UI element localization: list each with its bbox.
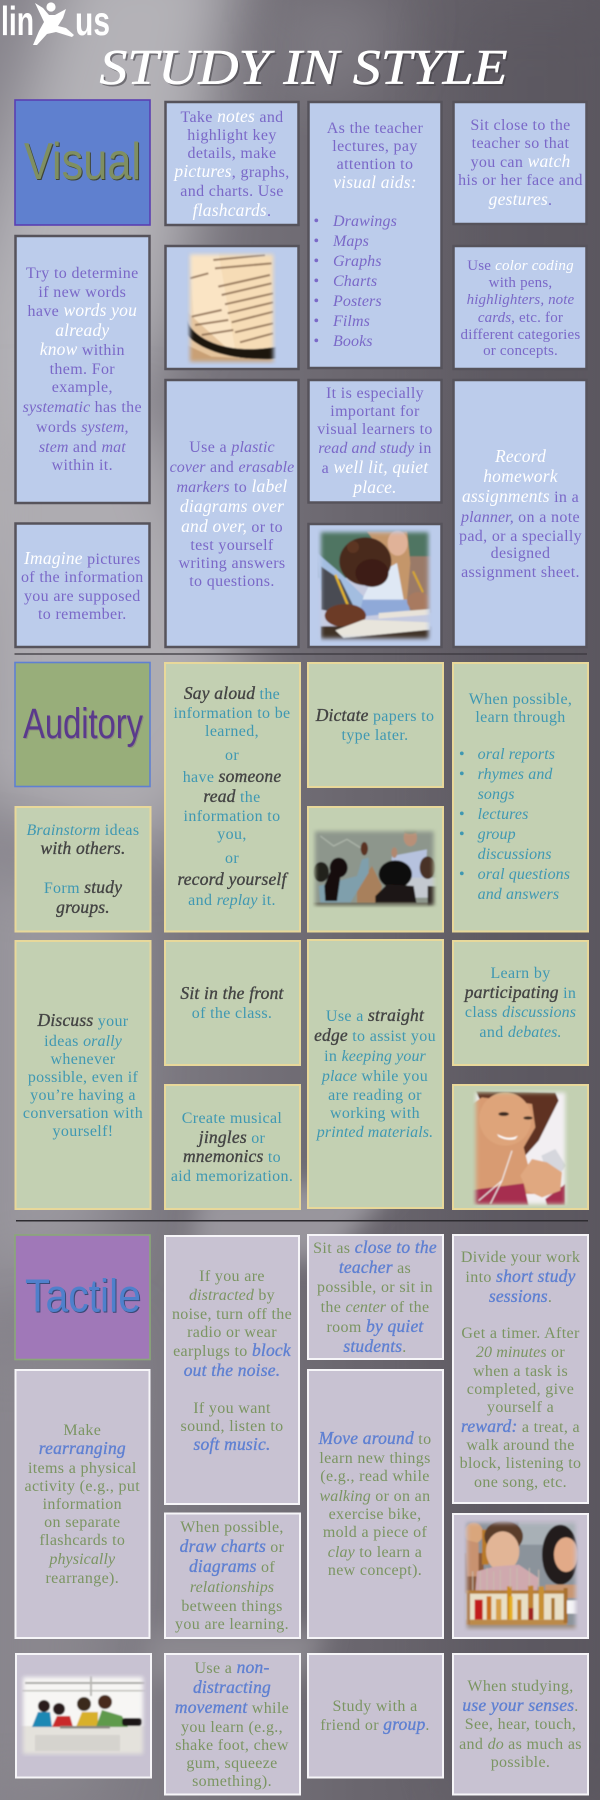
- panel: learn through: rhymes and: [478, 766, 553, 783]
- panel: short study sessions: Get a timer. After: [461, 1325, 580, 1342]
- panel: short study sessions: into short study: [465, 1266, 576, 1286]
- panel: study with friend: Study with a: [332, 1698, 418, 1715]
- panel: close to teacher: [308, 1235, 443, 1359]
- panel: jingles: Create musical: [182, 1110, 282, 1127]
- panel: record homework: planner, on a note: [460, 509, 580, 526]
- panel: move around: exercise bike,: [329, 1506, 421, 1523]
- panel: draw charts: between things: [181, 1598, 283, 1615]
- logo: linkus: [1, 0, 110, 45]
- panel: imagine: Imagine pictures: [23, 548, 141, 568]
- panel: straight edge: edge to assist you: [314, 1025, 436, 1045]
- panel: participating: and debates.: [479, 1024, 562, 1041]
- panel: visual aids: •: [314, 253, 319, 270]
- panel: words within words: them. For: [50, 361, 115, 378]
- panel: rearranging: on separate: [44, 1514, 120, 1531]
- panel: block noise: If you are: [199, 1268, 265, 1285]
- panel: close to teacher: room by quiet: [326, 1316, 424, 1336]
- panel: non-distracting movement: something).: [192, 1773, 272, 1790]
- panel: visual aids: •: [314, 233, 319, 250]
- panel: visual aids: Films: [332, 313, 370, 330]
- panel: imagine: to remember.: [38, 606, 127, 623]
- panel: well lit place: It is especially: [326, 385, 424, 402]
- panel: visual aids: As the teacher: [327, 120, 424, 137]
- panel: well lit place: a well lit, quiet: [322, 457, 429, 477]
- panel: words within words: have words you: [28, 300, 137, 320]
- panel: words within words: [16, 236, 150, 503]
- panel: children reading photo: [16, 1654, 151, 1778]
- panel: color coding: with pens,: [489, 275, 552, 291]
- panel: non-distracting movement: movement while: [175, 1697, 289, 1717]
- panel: record homework: designed: [491, 545, 550, 562]
- panel: short study sessions: reward: a treat, a: [461, 1416, 580, 1436]
- panel: take notes: and charts. Use: [180, 183, 284, 200]
- panel: learn through: group: [478, 826, 516, 843]
- panel: color coding: or concepts.: [483, 343, 558, 359]
- panel: jingles: aid memorization.: [171, 1168, 293, 1185]
- panel: take notes: Take notes and: [180, 106, 284, 126]
- panel: say aloud: or: [225, 850, 239, 867]
- panel: boy studying photo: [308, 524, 442, 647]
- panel: visual aids: Books: [333, 333, 373, 350]
- panel: participating: Learn by: [490, 965, 551, 982]
- panel: learn through: •: [459, 766, 465, 783]
- panel: sit close: teacher so that: [472, 135, 570, 152]
- section: visual: [15, 100, 586, 647]
- panel: short study sessions: walk around the: [466, 1437, 575, 1454]
- panel: short study sessions: block, listening to: [460, 1455, 581, 1472]
- panel: use your senses: See, hear, touch,: [465, 1716, 576, 1733]
- panel: use your senses: When studying,: [467, 1678, 574, 1695]
- panel: record homework: Record: [494, 446, 546, 466]
- panel: learn through: lectures: [478, 806, 528, 823]
- panel: say aloud: record yourself: [177, 869, 288, 889]
- panel: say aloud: you,: [217, 826, 247, 843]
- panel: dictate: [308, 663, 443, 787]
- panel: rearranging: activity (e.g., put: [25, 1478, 140, 1495]
- panel: say aloud: or: [225, 747, 239, 764]
- panel: well lit place: read and study in: [318, 440, 432, 457]
- panel: move around: clay to learn a: [328, 1544, 422, 1561]
- panel: learn through: •: [459, 826, 465, 843]
- panel: close to teacher: teacher as: [339, 1257, 411, 1277]
- panel: study with friend: [308, 1654, 443, 1778]
- panel: short study sessions: when a task is: [473, 1363, 568, 1380]
- panel: visual aids: Posters: [332, 293, 382, 310]
- panel: imagine: you are supposed: [24, 588, 141, 605]
- panel: straight edge: place while you: [321, 1068, 428, 1085]
- panel: non-distracting movement: shake foot, chew: [175, 1737, 289, 1754]
- panel: rearranging: physically: [48, 1551, 116, 1568]
- panel: words within words: Try to determine: [26, 265, 139, 282]
- panel: short study sessions: 20 minutes or: [476, 1344, 565, 1361]
- heading: Tactile: Tactile: [26, 1270, 142, 1322]
- panel: close to teacher: possible, or sit in: [317, 1279, 433, 1296]
- panel: rearranging: rearrange).: [46, 1570, 119, 1587]
- panel: visual aids: Maps: [332, 233, 369, 250]
- panel: words within words: systematic has the: [23, 399, 142, 416]
- panel: learn through: [453, 663, 588, 932]
- panel: words within words: within it.: [52, 457, 113, 474]
- panel: short study sessions: [453, 1235, 588, 1503]
- panel: take notes: highlight key: [187, 127, 277, 144]
- panel: words within words: example,: [52, 379, 113, 396]
- panel: jingles: mnemonics to: [183, 1146, 281, 1166]
- panel: block noise: earplugs to block: [173, 1340, 292, 1360]
- panel: move around: learn new things: [319, 1450, 431, 1467]
- panel: learn through: learn through: [475, 709, 566, 726]
- panel: visual aids: •: [314, 313, 319, 330]
- panel: label diagrams: cover and erasable: [170, 459, 294, 476]
- panel: move around: new concept).: [328, 1562, 422, 1579]
- panel: learn through: When possible,: [469, 691, 572, 708]
- panel: draw charts: When possible,: [180, 1519, 284, 1536]
- panel: non-distracting movement: gum, squeeze: [186, 1755, 278, 1772]
- panel: visual aids: lectures, pay: [332, 138, 418, 155]
- title: STUDY IN STYLE: [102, 40, 509, 96]
- panel: move around: mold a piece of: [323, 1524, 427, 1541]
- panel: woman with headphones photo: [453, 1085, 588, 1209]
- panel: block noise: radio or wear: [187, 1324, 277, 1341]
- panel: say aloud: Say aloud the: [184, 683, 280, 703]
- divider: [14, 653, 587, 655]
- panel: use your senses: use your senses.: [462, 1695, 579, 1715]
- panel: move around: [308, 1370, 443, 1638]
- panel: take notes: [166, 102, 298, 225]
- panel: straight edge: in keeping your: [324, 1048, 427, 1065]
- panel: say aloud: learned,: [205, 723, 259, 740]
- panel: well lit place: [308, 380, 442, 502]
- panel: visual aids: •: [314, 213, 319, 230]
- panel: visual aids: attention to: [337, 156, 413, 173]
- panel: visual aids: [308, 102, 442, 368]
- panel: learn through: and answers: [478, 886, 559, 903]
- panel: label diagrams: to questions.: [189, 573, 275, 590]
- panel: color coding: highlighters, note: [467, 292, 575, 308]
- heading: Visual: Visual: [24, 133, 141, 191]
- panel: brainstorm: [16, 807, 150, 932]
- panel: sit close: Sit close to the: [470, 117, 571, 134]
- panel: words within words: know within: [40, 339, 125, 359]
- panel: sit in front: of the class.: [192, 1005, 272, 1022]
- panel: take notes: details, make: [188, 145, 276, 162]
- panel: visual aids: Graphs: [333, 253, 382, 270]
- panel: visual aids: •: [314, 273, 319, 290]
- panel: block noise: noise, turn off the: [172, 1306, 292, 1323]
- panel: close to teacher: the center of the: [321, 1299, 429, 1316]
- heading: Auditory: Auditory: [23, 700, 143, 748]
- panel: move around: (e.g., read while: [320, 1468, 430, 1485]
- panel: discuss orally: yourself!: [53, 1123, 113, 1140]
- panel: straight edge: [308, 940, 443, 1208]
- panel: label diagrams: Use a plastic: [189, 439, 275, 456]
- panel: discuss orally: conversation with: [23, 1105, 143, 1122]
- panel: well lit place: visual learners to: [317, 421, 433, 438]
- panel: record homework: homework: [483, 466, 559, 486]
- heading: Tactile: Tactile: [25, 1270, 141, 1322]
- panel: close to teacher: students.: [343, 1336, 407, 1356]
- panel: block noise: out the noise.: [184, 1360, 280, 1380]
- panel: rearranging: [16, 1370, 150, 1638]
- panel: record homework: assignment sheet.: [461, 564, 580, 581]
- panel: take notes: pictures, graphs,: [172, 161, 290, 181]
- panel: discuss orally: whenever: [50, 1051, 116, 1068]
- panel: say aloud: information to: [184, 808, 280, 825]
- panel: learn through: songs: [478, 786, 515, 803]
- panel: short study sessions: yourself a: [487, 1399, 554, 1416]
- panel: take notes: flashcards.: [193, 200, 271, 220]
- panel: straight edge: working with: [330, 1105, 420, 1122]
- divider: [16, 1220, 588, 1222]
- panel: draw charts: you are learning.: [175, 1616, 289, 1633]
- panel: learn through: discussions: [478, 846, 552, 863]
- panel: learn through: •: [459, 806, 465, 823]
- panel: move around: Move around to: [318, 1428, 431, 1448]
- panel: use your senses: [453, 1654, 588, 1794]
- panel: record homework: [454, 380, 586, 647]
- panel: participating: participating in: [463, 982, 576, 1002]
- panel: close to teacher: Sit as close to the: [313, 1237, 437, 1257]
- panel: discuss orally: [16, 941, 150, 1209]
- panel: visual aids: visual aids:: [333, 172, 417, 192]
- panel: imagine: [16, 524, 150, 647]
- panel: rearranging: items a physical: [28, 1460, 137, 1477]
- panel: participating: class discussions: [465, 1004, 576, 1021]
- panel: non-distracting movement: Use a non-: [195, 1657, 269, 1677]
- panel: dictate: type later.: [342, 727, 408, 744]
- panel: sit in front: [165, 941, 300, 1065]
- panel: draw charts: relationships: [190, 1579, 274, 1596]
- panel: rearranging: rearranging: [39, 1438, 126, 1458]
- panel: rearranging: Make: [63, 1422, 101, 1439]
- panel: move around: walking or on an: [320, 1488, 430, 1505]
- panel: discuss orally: you’re having a: [30, 1087, 136, 1104]
- panel: dictate: Dictate papers to: [315, 705, 434, 725]
- panel: brainstorm: Brainstorm ideas: [27, 822, 139, 839]
- panel: sit close: you can watch: [471, 151, 570, 171]
- panel: learn through: •: [459, 746, 465, 763]
- panel: words within words: words system,: [36, 419, 129, 436]
- panel: say aloud: have someone: [183, 766, 281, 786]
- panel: non-distracting movement: distracting: [193, 1677, 271, 1697]
- panel: sit close: [454, 102, 586, 224]
- panel: visual aids: •: [314, 333, 319, 350]
- panel: learn through: •: [459, 866, 465, 883]
- panel: use your senses: possible.: [491, 1754, 550, 1771]
- panel: draw charts: draw charts or: [180, 1536, 285, 1556]
- panel: straight edge: Use a straight: [326, 1005, 425, 1025]
- panel: draw charts: diagrams of: [189, 1556, 275, 1576]
- panel: block noise: distracted by: [189, 1287, 275, 1304]
- panel: color coding: [454, 246, 586, 369]
- panel: brainstorm: groups.: [56, 897, 110, 917]
- section: auditory: [15, 662, 588, 1209]
- panel: label diagrams: markers to label: [176, 476, 288, 496]
- panel: rearranging: information: [43, 1496, 122, 1513]
- panel: non-distracting movement: you learn (e.g.,: [181, 1719, 283, 1736]
- panel: brainstorm: Form study: [44, 877, 122, 897]
- panel: sit in front: Sit in the front: [180, 983, 285, 1003]
- heading: Visual: [15, 100, 150, 225]
- panel: brainstorm: with others.: [40, 838, 126, 858]
- panel: color coding: different categories: [461, 327, 580, 343]
- panel: visual aids: •: [314, 293, 319, 310]
- panel: say aloud: [165, 663, 300, 932]
- panel: short study sessions: one song, etc.: [474, 1474, 567, 1491]
- panel: short study sessions: sessions.: [489, 1286, 552, 1306]
- panel: jingles: jingles or: [197, 1127, 266, 1147]
- panel: participating: [453, 941, 588, 1065]
- panel: words within words: already: [55, 320, 109, 340]
- panel: discuss orally: possible, even if: [28, 1069, 139, 1086]
- panel: dictionary photo: [166, 246, 298, 369]
- panel: rearranging: flashcards to: [39, 1532, 125, 1549]
- panel: jingles: [165, 1085, 300, 1209]
- panel: label diagrams: and over, or to: [181, 516, 283, 536]
- panel: discuss orally: ideas orally: [44, 1033, 123, 1050]
- panel: color coding: Use color coding: [467, 258, 574, 274]
- panel: say aloud: read the: [203, 786, 261, 806]
- panel: color coding: cards, etc. for: [478, 310, 563, 326]
- panel: learn through: oral questions: [478, 866, 570, 883]
- panel: learn through: oral reports: [478, 746, 555, 763]
- panel: say aloud: information to be: [173, 705, 291, 722]
- panel: words within words: if new words: [38, 284, 126, 301]
- panel: well lit place: important for: [330, 403, 420, 420]
- panel: non-distracting movement: [165, 1654, 300, 1794]
- panel: visual aids: Drawings: [332, 213, 397, 230]
- panel: record homework: pad, or a specially: [459, 528, 582, 545]
- panel: sit close: gestures.: [489, 189, 552, 209]
- heading: Auditory: Auditory: [24, 701, 144, 749]
- panel: sit close: his or her face and: [458, 172, 583, 189]
- panel: use your senses: and do as much as: [459, 1736, 582, 1753]
- panel: short study sessions: Divide your work: [461, 1249, 580, 1266]
- heading: Auditory: [15, 662, 150, 786]
- panel: straight edge: are reading or: [328, 1087, 422, 1104]
- title: STUDY IN STYLE: [100, 38, 507, 94]
- panel: label diagrams: [166, 380, 298, 647]
- panel: test tubes photo: [453, 1514, 588, 1638]
- panel: straight edge: printed materials.: [316, 1124, 433, 1141]
- panel: visual aids: Charts: [333, 273, 377, 290]
- panel: draw charts: [165, 1514, 300, 1638]
- panel: words within words: stem and mat: [39, 439, 126, 456]
- panel: classroom photo: [308, 807, 443, 932]
- panel: say aloud: and replay it.: [188, 892, 276, 909]
- panel: block noise: sound, listen to: [181, 1418, 283, 1435]
- section: tactile: [15, 1235, 588, 1794]
- panel: label diagrams: test yourself: [190, 537, 274, 554]
- panel: record homework: assignments in a: [462, 486, 579, 506]
- panel: label diagrams: writing answers: [178, 555, 286, 572]
- heading: Visual: Visual: [25, 134, 142, 192]
- panel: block noise: [165, 1236, 299, 1504]
- panel: discuss orally: Discuss your: [37, 1010, 129, 1030]
- panel: short study sessions: completed, give: [467, 1381, 574, 1398]
- panel: block noise: If you want: [193, 1400, 271, 1417]
- panel: study with friend: friend or group.: [320, 1714, 430, 1734]
- heading: Tactile: [15, 1235, 150, 1360]
- panel: block noise: soft music.: [193, 1434, 271, 1454]
- panel: imagine: of the information: [21, 569, 144, 586]
- panel: label diagrams: diagrams over: [180, 496, 284, 516]
- panel: well lit place: place.: [351, 477, 397, 497]
